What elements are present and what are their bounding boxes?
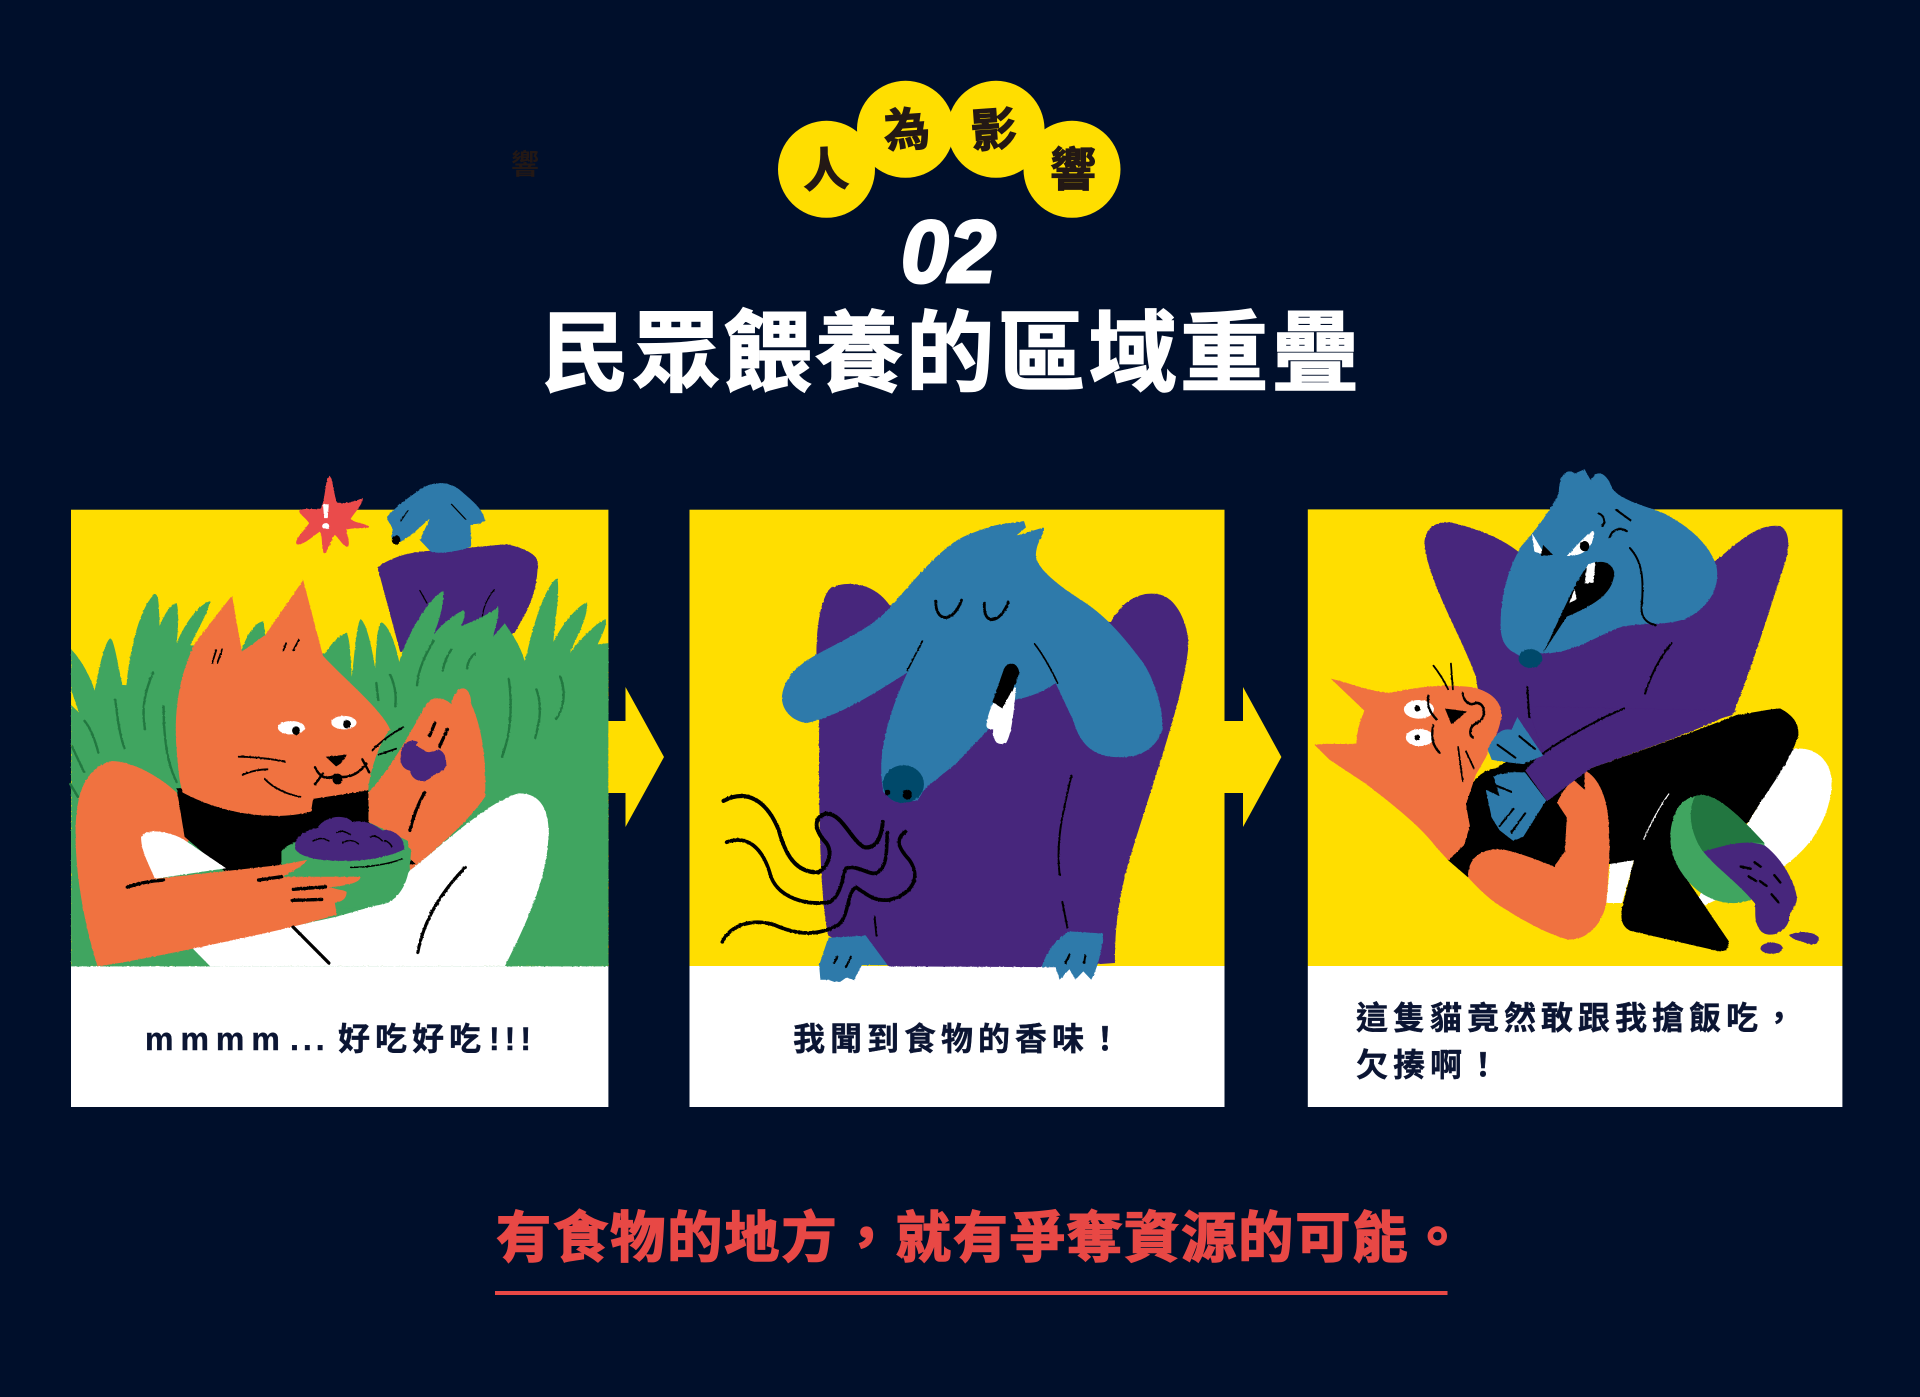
bowl	[281, 841, 411, 908]
dog body	[1424, 522, 1788, 770]
dog head	[1501, 469, 1717, 655]
smell lines	[722, 796, 915, 942]
left arm back	[76, 761, 297, 966]
dog mouth and teeth	[1543, 562, 1614, 653]
drool	[986, 687, 1016, 744]
black shirt and trousers	[1448, 709, 1798, 951]
body lines	[834, 776, 1085, 967]
panel 1: cat eating in the grass	[70, 476, 608, 1107]
panel 3: dog attacks cat	[1308, 469, 1842, 1107]
grass	[70, 578, 608, 966]
panel 1 illustration	[70, 476, 608, 966]
badge: 人為影響 circles: 人	[801, 143, 850, 197]
black line work	[127, 723, 465, 963]
arrow 1	[608, 687, 664, 827]
number 02: 02	[901, 202, 996, 301]
paws	[819, 931, 1103, 982]
spilled bowl	[1670, 795, 1819, 954]
black shirt	[177, 786, 416, 872]
right arm	[368, 688, 485, 870]
panel 1 caption: !!!	[489, 1021, 536, 1057]
panel 3 caption: 欠揍啊！	[1356, 1047, 1504, 1083]
dog behind the grass	[378, 483, 538, 652]
cat head	[1315, 679, 1502, 860]
food in bowl	[295, 817, 404, 861]
panel 1 caption: 好吃好吃	[338, 1021, 486, 1057]
panel 2 caption: 我聞到食物的香味！	[793, 1021, 1126, 1057]
cat arm	[1468, 770, 1609, 939]
stray character top left: 響	[511, 149, 539, 180]
panel 2: dog smelling food	[690, 510, 1224, 1107]
bottom statement: 有食物的地方，就有爭奪資源的可能。	[496, 1207, 1467, 1269]
panel 1 caption: ...	[290, 1021, 329, 1057]
arrow 2	[1224, 687, 1281, 827]
dog body	[816, 584, 1188, 967]
dog hands	[1486, 717, 1546, 841]
eyes and cheek lines	[936, 600, 1008, 620]
cat face	[1404, 664, 1484, 781]
white pants	[1606, 748, 1832, 905]
dog forearm	[1525, 706, 1737, 801]
food in hand	[400, 741, 446, 781]
white sleeve	[141, 831, 226, 879]
dog head with ears	[782, 521, 1163, 801]
badge: 人為影響 circles: 為	[882, 102, 932, 158]
front arm and fingers	[107, 860, 361, 963]
title: 民眾餵養的區域重疊	[541, 304, 1363, 403]
panel 3 illustration	[1315, 469, 1832, 954]
panel 3 caption: 這隻貓竟然敢跟我搶飯吃，	[1356, 1000, 1800, 1036]
white pants	[192, 793, 549, 966]
mouth	[992, 664, 1019, 708]
panel 3 card	[1308, 509, 1842, 1107]
underline	[495, 1291, 1448, 1295]
cat head	[176, 580, 390, 816]
icon: red alarm star	[296, 476, 369, 553]
panel 2 card	[690, 510, 1224, 1107]
nose	[883, 765, 924, 803]
dog nose	[1519, 649, 1542, 668]
dog lines	[1496, 510, 1672, 832]
badge: 人為影響 circles: 響	[1050, 144, 1096, 196]
panel 2 illustration	[722, 521, 1188, 982]
panel 1 card	[71, 510, 608, 1107]
badge: 人為影響 circles: 影	[969, 102, 1019, 158]
dog eyes	[1532, 531, 1594, 556]
cat face	[212, 640, 403, 797]
panel 1 caption: mmmm	[145, 1021, 287, 1057]
badge: 人為影響 circles	[778, 81, 1120, 218]
